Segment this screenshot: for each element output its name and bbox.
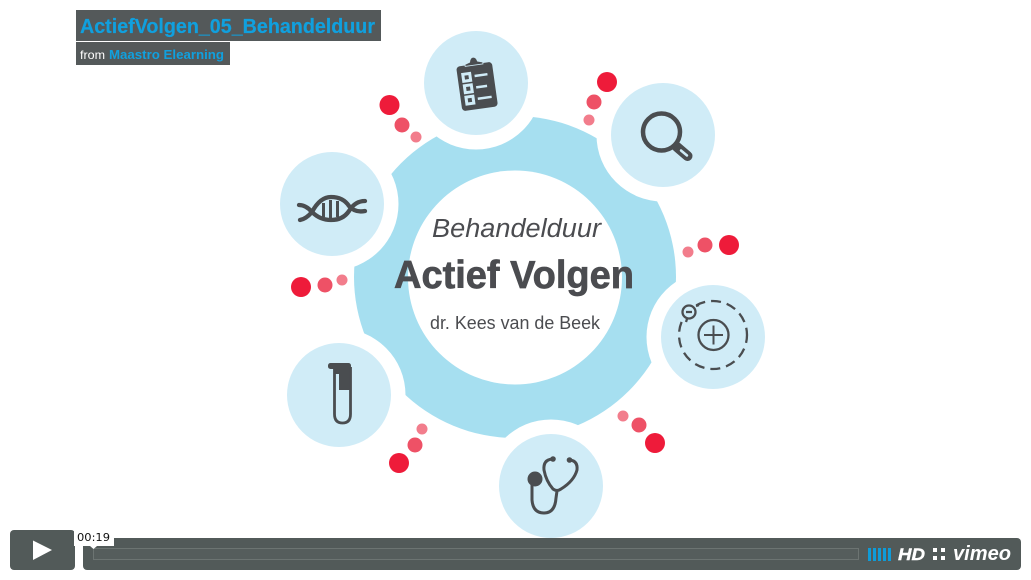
- byline label: from: [80, 48, 105, 62]
- quality bars: [868, 548, 891, 561]
- time tooltip: [74, 530, 114, 549]
- icon: magnifying glass: [611, 83, 715, 187]
- time value: 00:19: [77, 531, 110, 544]
- icon: test tube: [287, 343, 391, 447]
- play button: [10, 530, 75, 570]
- centre title text: [394, 215, 634, 333]
- icon: plus and minus cell: [661, 285, 765, 389]
- timeline track: [94, 548, 858, 560]
- icon: stethoscope: [499, 434, 603, 538]
- dots: lower right: [618, 410, 665, 453]
- dots: left: [291, 274, 348, 297]
- vimeo logo: vimeo: [953, 543, 1011, 565]
- subtitle: Behandelduur: Behandelduur: [432, 215, 603, 243]
- heading: Actief Volgen: Actief Volgen: [394, 254, 634, 297]
- dots: upper right: [584, 72, 617, 126]
- dots: right: [682, 235, 739, 258]
- gear ring: [266, 16, 780, 552]
- icon: DNA helix: [280, 152, 384, 256]
- dots: upper left: [380, 95, 422, 142]
- byline author: Maastro Elearning: [109, 47, 224, 62]
- fullscreen icon: [933, 548, 945, 560]
- title bar: [76, 10, 381, 41]
- video title: ActiefVolgen_05_Behandelduur: [80, 16, 375, 38]
- HD label: HD: [898, 545, 925, 564]
- icon: clipboard checklist: [424, 31, 528, 135]
- author: dr. Kees van de Beek: dr. Kees van de Beek: [430, 313, 601, 333]
- byline bar: [76, 42, 230, 65]
- dots: lower left: [389, 424, 428, 473]
- control bar: [83, 538, 1021, 570]
